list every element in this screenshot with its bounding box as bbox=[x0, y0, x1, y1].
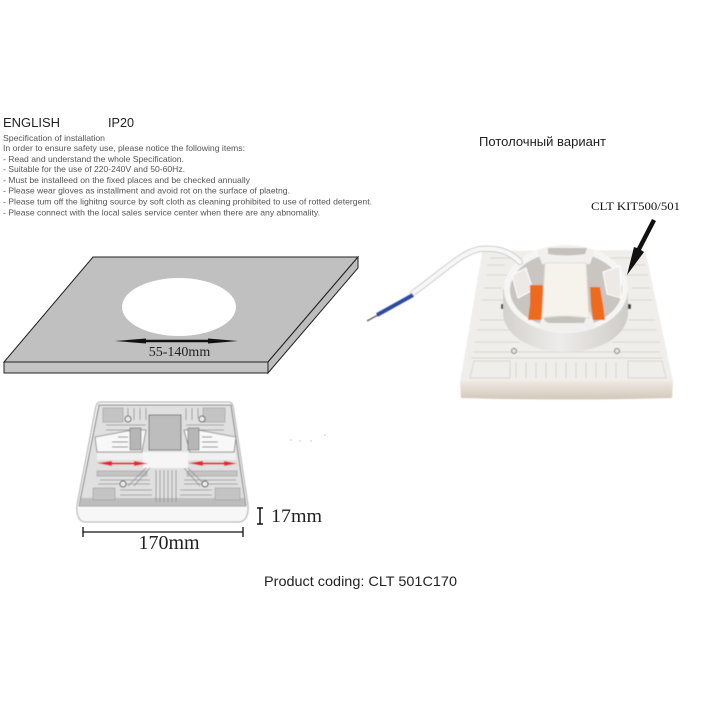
diagram: panel light back view bbox=[77, 402, 248, 522]
dimension: width 170mm: 170mm bbox=[138, 532, 200, 554]
driver box bbox=[149, 415, 181, 450]
text block: installation specification: - Suitable for the use of 220-240V and 50-60Hz. bbox=[3, 164, 185, 174]
text block: installation specification: - Please connect with the local sales service center when there are any abnomality. bbox=[3, 208, 320, 218]
orange connectors bbox=[528, 285, 543, 320]
dimension: thickness 17mm: 17mm bbox=[271, 506, 322, 527]
text block: installation specification bbox=[3, 133, 372, 218]
panel relief bbox=[470, 258, 666, 378]
text block: installation specification: In order to ensure safety use, please notice the following items: bbox=[3, 143, 245, 153]
heat-sink channels bbox=[98, 408, 238, 502]
heading: language and protection rating: IP20 bbox=[108, 115, 134, 130]
arrow: hole diameter bbox=[115, 338, 238, 344]
panel base bbox=[460, 250, 673, 398]
ring ledges bbox=[537, 245, 595, 264]
label: CLT KIT500/501: CLT KIT500/501 bbox=[591, 199, 680, 213]
footer: product coding: Product coding: CLT 501C170 bbox=[264, 573, 457, 589]
label: hole diameter: 55-140mm bbox=[149, 345, 210, 360]
text block: installation specification: - Must be installeed on the fixed places and be checked annually bbox=[3, 175, 251, 185]
text block: installation specification: - Please wear gloves as installment and avoid rot on the surface of plaetng. bbox=[3, 186, 290, 196]
heading: ceiling-mounted variant: Потолочный вариант bbox=[479, 135, 606, 149]
heading: language and protection rating: ENGLISH bbox=[3, 115, 60, 130]
text block: installation specification: Specification of installation bbox=[3, 133, 105, 143]
dark lower rim bbox=[79, 498, 246, 506]
cut-out hole bbox=[122, 278, 236, 336]
text block: installation specification: - Read and understand the whole Specification. bbox=[3, 154, 184, 164]
spring clips bbox=[95, 430, 236, 452]
photo: surface-mount kit on panel bbox=[367, 245, 673, 400]
cable bbox=[413, 249, 520, 293]
arrow: pointer to mounting kit bbox=[627, 219, 656, 275]
dimension: width 170mm bbox=[83, 527, 243, 554]
diagram: ceiling plate with cut-out bbox=[4, 257, 358, 373]
driver block bbox=[542, 263, 589, 318]
red arrows bbox=[97, 461, 148, 466]
heading: language and protection rating bbox=[3, 115, 134, 130]
mounting ring bbox=[503, 289, 628, 352]
stippled heat-sink pads bbox=[93, 408, 240, 500]
text block: installation specification: - Please tum off the lighitng source by soft cloth as cleaning prohibited to use of rotted detergent. bbox=[3, 196, 372, 206]
decorative specks bbox=[290, 434, 326, 442]
